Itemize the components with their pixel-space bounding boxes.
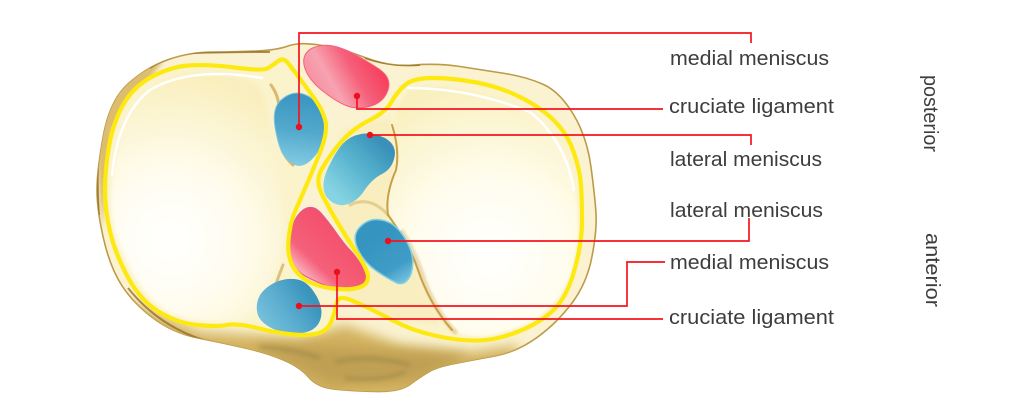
medial meniscus, anterior (pink)	[289, 207, 367, 289]
infographic: tibial plateau with labels	[96, 32, 941, 392]
label: cruciate ligament (posterior): cruciate ligament	[669, 95, 834, 118]
medial meniscus, posterior (pink)	[304, 45, 389, 108]
left tibial plateau	[111, 72, 283, 322]
leader: cruciate ligament anterior	[337, 272, 663, 319]
leader: lateral meniscus posterior	[370, 135, 751, 145]
side label: anterior: anterior	[921, 233, 944, 307]
lateral meniscus, anterior (blue)	[355, 219, 413, 284]
lateral meniscus, posterior (blue)	[323, 134, 395, 205]
inner cartilage area	[105, 59, 582, 341]
label: cruciate ligament (anterior): cruciate ligament	[669, 306, 834, 329]
white halo inside the yellow outline	[112, 74, 574, 190]
leader: medial meniscus posterior	[299, 33, 751, 127]
side label: posterior: posterior	[919, 75, 942, 152]
label: lateral meniscus (anterior): lateral meniscus	[670, 199, 823, 222]
cruciate ligament, posterior (blue)	[274, 93, 327, 165]
yellow articular outline	[105, 59, 582, 341]
leader lines	[299, 33, 751, 319]
leader end dots	[296, 93, 391, 309]
central intercondylar area	[316, 118, 440, 325]
golden shading and dark accents of the rim	[95, 52, 520, 400]
cruciate ligament, anterior (blue)	[257, 279, 321, 334]
label: medial meniscus (anterior): medial meniscus	[670, 251, 829, 274]
label: lateral meniscus (posterior): lateral meniscus	[670, 148, 822, 171]
leader: cruciate ligament posterior	[357, 96, 663, 109]
label: medial meniscus (posterior): medial meniscus	[670, 47, 829, 70]
plateau edge shading	[268, 85, 455, 332]
bone silhouette	[97, 44, 596, 392]
leader: lateral meniscus anterior	[388, 218, 749, 241]
leader: medial meniscus anterior	[299, 262, 665, 306]
right tibial plateau	[387, 86, 578, 336]
tibial bone	[95, 44, 596, 400]
